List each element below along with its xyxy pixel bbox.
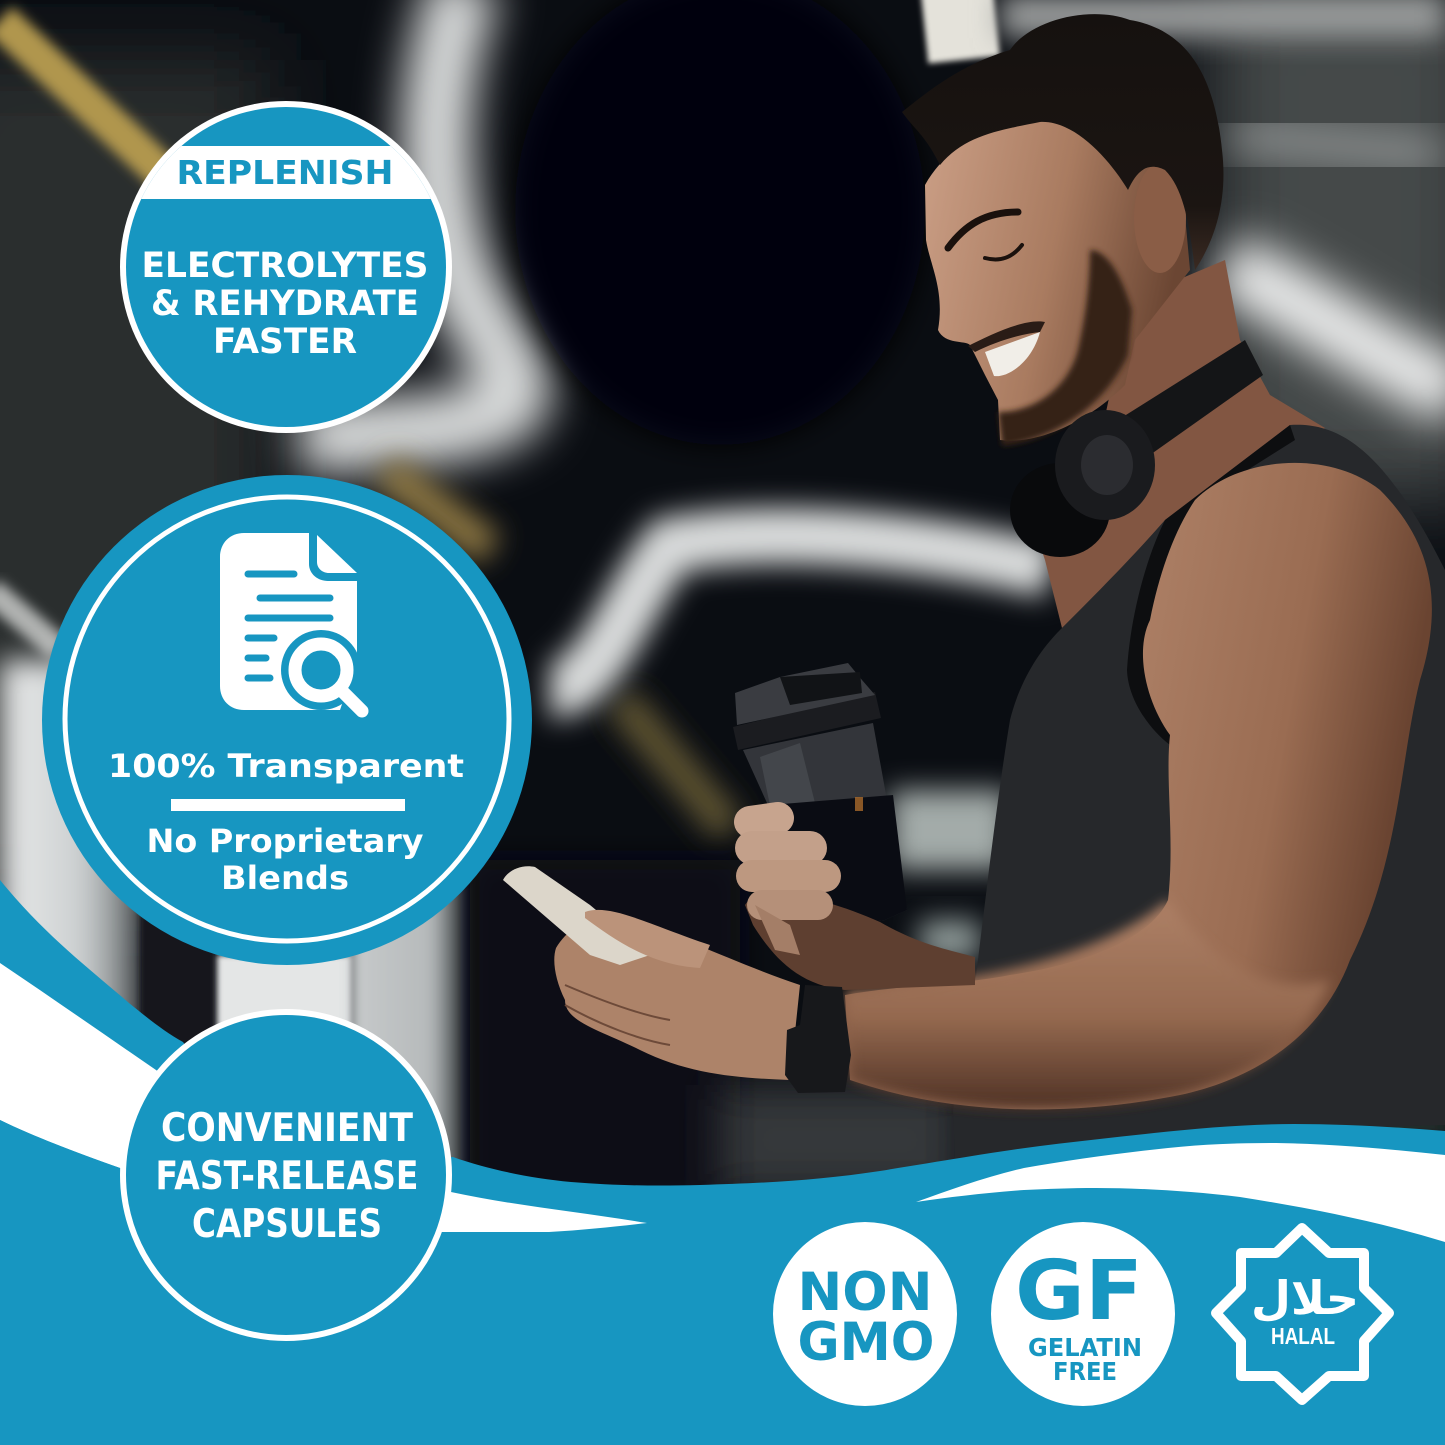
electrolytes text	[142, 246, 428, 362]
white banner in circle	[141, 146, 431, 199]
badge: halal: HALAL	[1271, 1323, 1335, 1349]
proprietary blends label	[146, 822, 424, 897]
divider bar	[171, 799, 405, 811]
badge: gelatin free: GF	[1015, 1244, 1143, 1339]
badge: gelatin free	[991, 1222, 1175, 1406]
upper left blue wave band	[0, 880, 300, 1200]
shaker bottle	[733, 663, 907, 935]
neck and chest	[1025, 260, 1325, 628]
badge: non gmo: GMO	[798, 1312, 934, 1373]
panel: capsules circle	[123, 1012, 449, 1338]
badge: halal	[1216, 1228, 1389, 1400]
face	[925, 120, 1190, 441]
fingers	[750, 818, 825, 905]
mustache	[968, 321, 1045, 352]
right white wave	[916, 1143, 1445, 1242]
hair	[902, 14, 1223, 270]
replenish heading: REPLENISH	[176, 153, 394, 192]
panel: replenish circle	[120, 101, 452, 433]
upper arm and forearm	[845, 463, 1432, 1109]
eye and eyebrow	[948, 212, 1022, 259]
center white wedge	[440, 1192, 647, 1232]
badge: non gmo: NON	[798, 1262, 932, 1323]
tank top trim	[1127, 425, 1295, 745]
badge: gelatin free: GELATIN	[1028, 1333, 1142, 1362]
watch	[785, 985, 851, 1093]
electrolytes text: FASTER	[213, 322, 357, 362]
panel: transparency circle	[42, 475, 532, 965]
gripping hand	[745, 818, 975, 990]
capsules text: CAPSULES	[192, 1202, 382, 1247]
man with shaker and phone	[503, 14, 1445, 1158]
capsules text: CONVENIENT	[161, 1106, 413, 1151]
proprietary blends label: Blends	[221, 859, 349, 897]
stubble beard	[998, 250, 1132, 446]
capsules text: FAST-RELEASE	[156, 1154, 418, 1199]
badge: halal: حلال	[1251, 1271, 1359, 1325]
smile teeth	[985, 332, 1040, 376]
electrolytes text: & REHYDRATE	[151, 284, 419, 324]
icon: document with magnifier	[220, 533, 365, 711]
headphones	[1010, 340, 1263, 557]
phone thumb	[585, 910, 710, 968]
capsules text	[156, 1106, 418, 1247]
smartphone	[503, 866, 650, 965]
badge: non gmo	[773, 1222, 957, 1406]
main blue wave	[0, 1120, 1445, 1445]
transparent label: 100% Transparent	[108, 747, 464, 785]
hand finger creases	[565, 985, 670, 1045]
phone hand	[554, 917, 800, 1080]
proprietary blends label: No Proprietary	[146, 822, 424, 860]
left white wave	[0, 963, 300, 1180]
blue and white wave	[0, 880, 1445, 1445]
tank top	[953, 425, 1445, 1158]
ear	[1134, 163, 1186, 273]
electrolytes text: ELECTROLYTES	[142, 246, 428, 286]
forearm shading	[845, 900, 1330, 1109]
badge: gelatin free: FREE	[1053, 1357, 1117, 1386]
